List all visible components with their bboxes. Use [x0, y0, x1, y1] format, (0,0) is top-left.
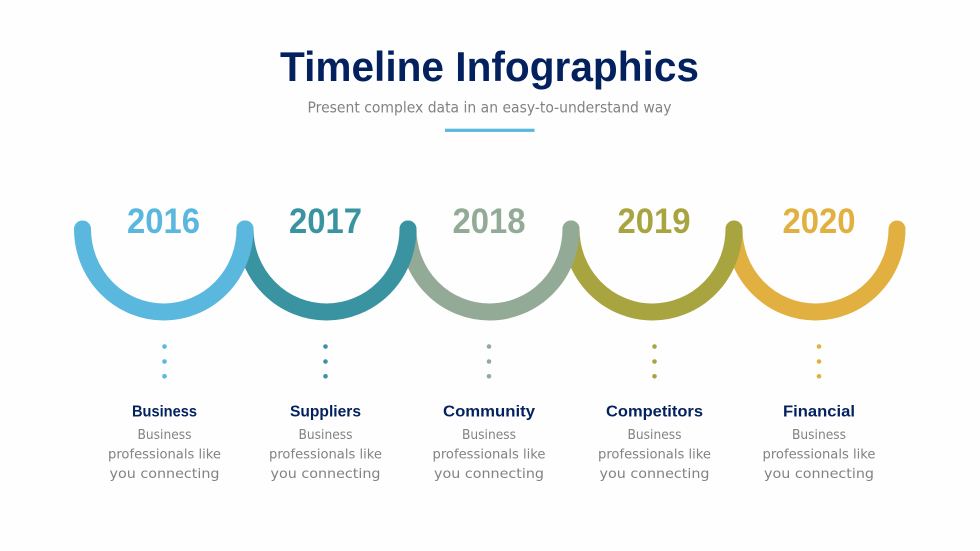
subtitle: Present complex data in an easy-to-understand way — [308, 98, 672, 116]
text block: Suppliers: Suppliers — [290, 404, 361, 421]
text block: Business: you connecting — [110, 466, 220, 482]
arc: 2020 — [734, 229, 897, 312]
text block: Financial: Financial — [783, 404, 855, 421]
text block: Community: professionals like — [432, 446, 546, 462]
text block: Competitors: professionals like — [598, 446, 711, 462]
dots: 2020 — [817, 344, 821, 379]
arc: 2017 — [245, 229, 408, 312]
year: 2016: 2016 — [127, 202, 200, 241]
text block: Competitors: Competitors — [606, 404, 703, 421]
arc: 2019 — [571, 229, 734, 312]
text block: Financial: you connecting — [764, 466, 874, 482]
text block: Business — [108, 404, 221, 482]
text block: Community: Business — [462, 427, 516, 443]
text block: Community: you connecting — [434, 466, 544, 482]
text block: Community: Community — [443, 404, 535, 421]
text block: Suppliers: professionals like — [269, 446, 382, 462]
year: 2020: 2020 — [782, 202, 856, 241]
dots: 2018 — [487, 344, 491, 379]
title: Timeline Infographics — [280, 43, 699, 90]
text block: Financial: professionals like — [762, 446, 876, 462]
text block: Financial — [762, 404, 876, 482]
dots: 2019 — [652, 344, 657, 379]
text block: Business: Business — [132, 404, 197, 421]
text block: Suppliers: Business — [298, 427, 352, 443]
text block: Suppliers: you connecting — [270, 466, 380, 482]
text block: Community — [432, 404, 546, 482]
text block: Business: Business — [138, 427, 192, 443]
dots: 2016 — [162, 344, 167, 379]
text block: Competitors: Business — [628, 427, 682, 443]
text block: Competitors: you connecting — [600, 466, 710, 482]
text block: Suppliers — [269, 404, 382, 482]
year: 2017: 2017 — [289, 202, 362, 241]
arc: 2018 — [408, 229, 571, 312]
text block: Business: professionals like — [108, 446, 221, 462]
timeline arcs — [82, 229, 897, 312]
year: 2018: 2018 — [452, 202, 526, 241]
text block: Competitors — [598, 404, 711, 482]
title underline accent — [445, 129, 534, 132]
text block: Financial: Business — [792, 427, 846, 443]
arc: 2016 — [82, 229, 245, 312]
dots: 2017 — [323, 344, 328, 379]
year: 2019: 2019 — [618, 202, 690, 241]
